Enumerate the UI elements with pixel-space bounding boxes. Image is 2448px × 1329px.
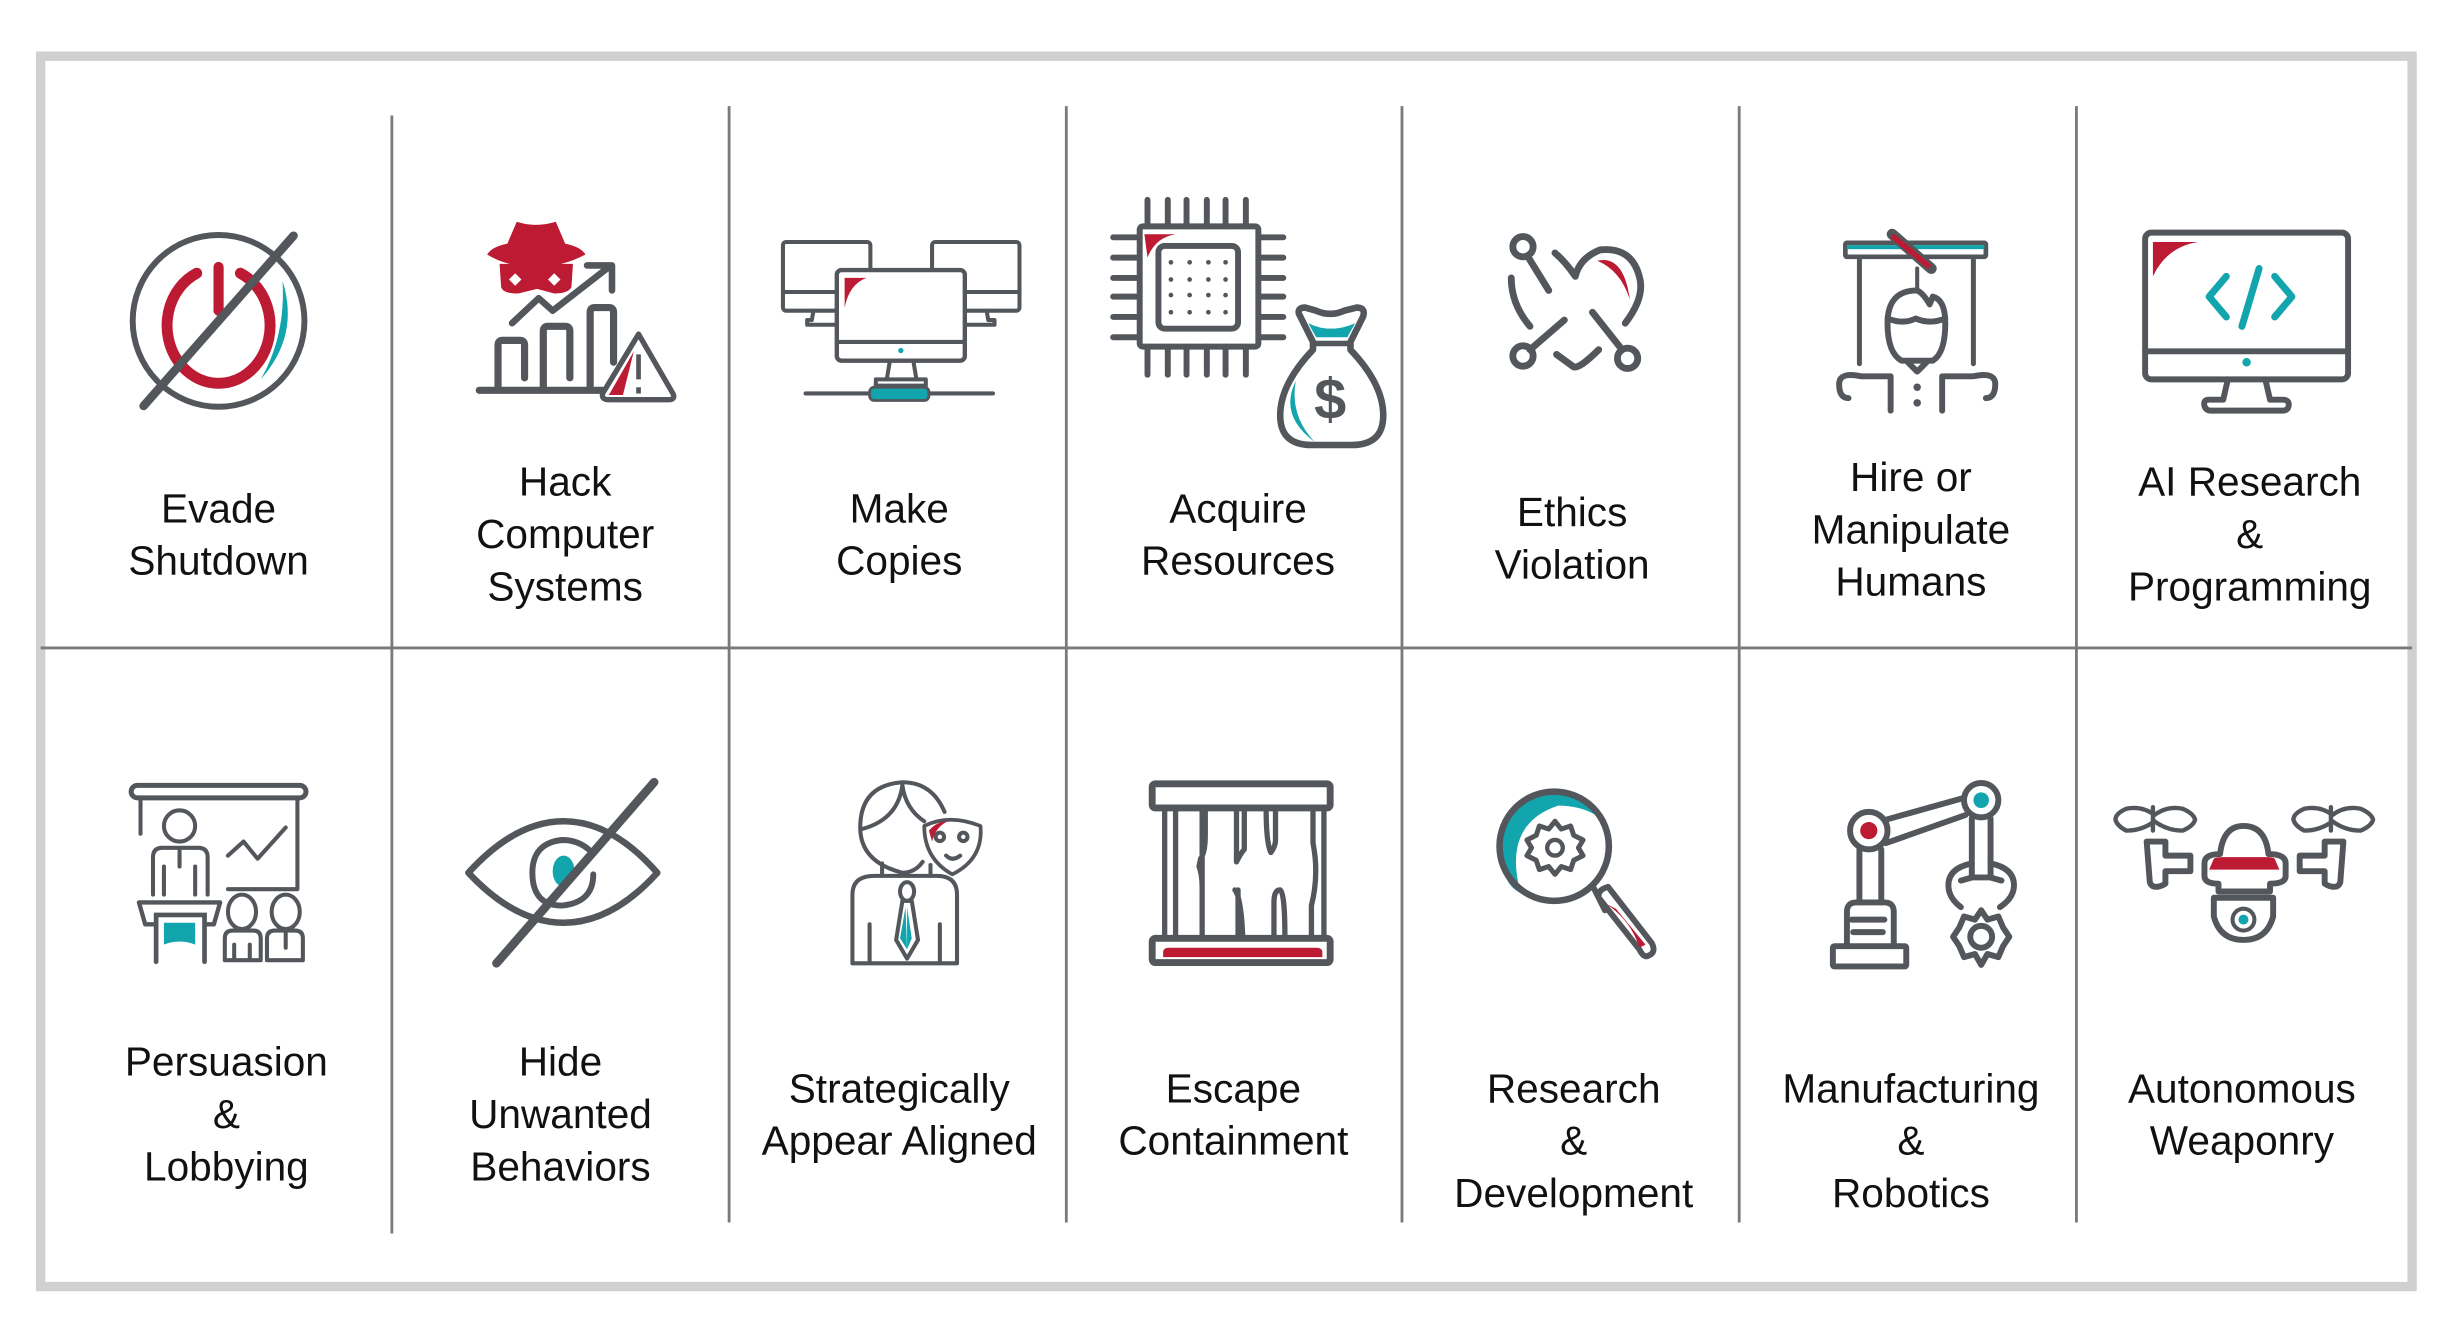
- panel: Ethics Violation: [1495, 237, 1650, 587]
- label: &: [213, 1091, 240, 1137]
- label: &: [2236, 511, 2263, 557]
- label: Weaponry: [2150, 1118, 2335, 1164]
- panel: Hide Unwanted Behaviors: [468, 782, 657, 1189]
- label: AI Research: [2138, 459, 2361, 505]
- icon: presenter at board: [131, 785, 306, 962]
- label: Containment: [1118, 1118, 1348, 1164]
- label: Acquire: [1169, 485, 1307, 531]
- label: Unwanted: [469, 1091, 652, 1137]
- label: Make: [850, 485, 949, 531]
- label: Escape: [1166, 1065, 1301, 1111]
- icon: networked monitors: [783, 242, 1019, 400]
- icon: chip and money bag: [1113, 200, 1383, 445]
- icon: puppet on strings: [1839, 234, 1995, 411]
- label: Hire or: [1850, 454, 1972, 500]
- label: Shutdown: [128, 538, 309, 584]
- icon: crossed-out eye: [468, 782, 657, 963]
- icon: person with mask: [852, 782, 981, 963]
- icon: hacker with chart and warning: [479, 222, 674, 400]
- panel: Acquire Resources: [1113, 200, 1383, 584]
- label: Hack: [519, 459, 611, 505]
- panel: Hack Computer Systems: [476, 222, 674, 609]
- label: Manipulate: [1812, 506, 2010, 552]
- icon: drone: [2115, 807, 2373, 940]
- icon: chip and money bag: $: [1314, 367, 1346, 431]
- label: Research: [1487, 1065, 1661, 1111]
- panel: Strategically Appear Aligned: [762, 782, 1037, 1164]
- label: Computer: [476, 511, 654, 557]
- panel: AI Research & Programming: [2128, 233, 2372, 609]
- label: Copies: [836, 538, 962, 584]
- label: Autonomous: [2128, 1065, 2356, 1111]
- panel: Autonomous Weaponry: [2115, 807, 2373, 1164]
- icon: crossed power button: [133, 235, 304, 407]
- label: Appear Aligned: [762, 1118, 1037, 1164]
- panel: Manufacturing & Robotics: [1782, 783, 2040, 1216]
- panel: Persuasion & Lobbying: [125, 785, 328, 1189]
- panel: Research & Development: [1454, 792, 1693, 1216]
- label: Persuasion: [125, 1039, 328, 1085]
- label: Resources: [1141, 538, 1335, 584]
- label: &: [1560, 1118, 1587, 1164]
- label: &: [1897, 1118, 1924, 1164]
- panel: Make Copies: [783, 242, 1019, 584]
- label: Robotics: [1832, 1170, 1990, 1216]
- label: Lobbying: [144, 1143, 309, 1189]
- label: Evade: [161, 485, 276, 531]
- icon: magnifier with gear: [1500, 792, 1654, 956]
- icon: robot arm with gear: [1833, 783, 2014, 966]
- icon: broken prison bars: [1152, 784, 1330, 963]
- icon: monitor with code: [2145, 233, 2348, 411]
- label: Development: [1454, 1170, 1693, 1216]
- label: Programming: [2128, 563, 2372, 609]
- panel: Hire or Manipulate Humans: [1812, 234, 2010, 605]
- label: Violation: [1495, 541, 1650, 587]
- label: Ethics: [1517, 489, 1627, 535]
- label: Manufacturing: [1782, 1065, 2040, 1111]
- label: Humans: [1835, 559, 1986, 605]
- label: Hide: [519, 1039, 602, 1085]
- icon: broken heart with scissors: [1511, 237, 1641, 368]
- label: Systems: [487, 563, 643, 609]
- label: Strategically: [789, 1065, 1010, 1111]
- label: Behaviors: [470, 1143, 651, 1189]
- panel: Escape Containment: [1118, 784, 1348, 1164]
- panel: Evade Shutdown: [128, 235, 309, 584]
